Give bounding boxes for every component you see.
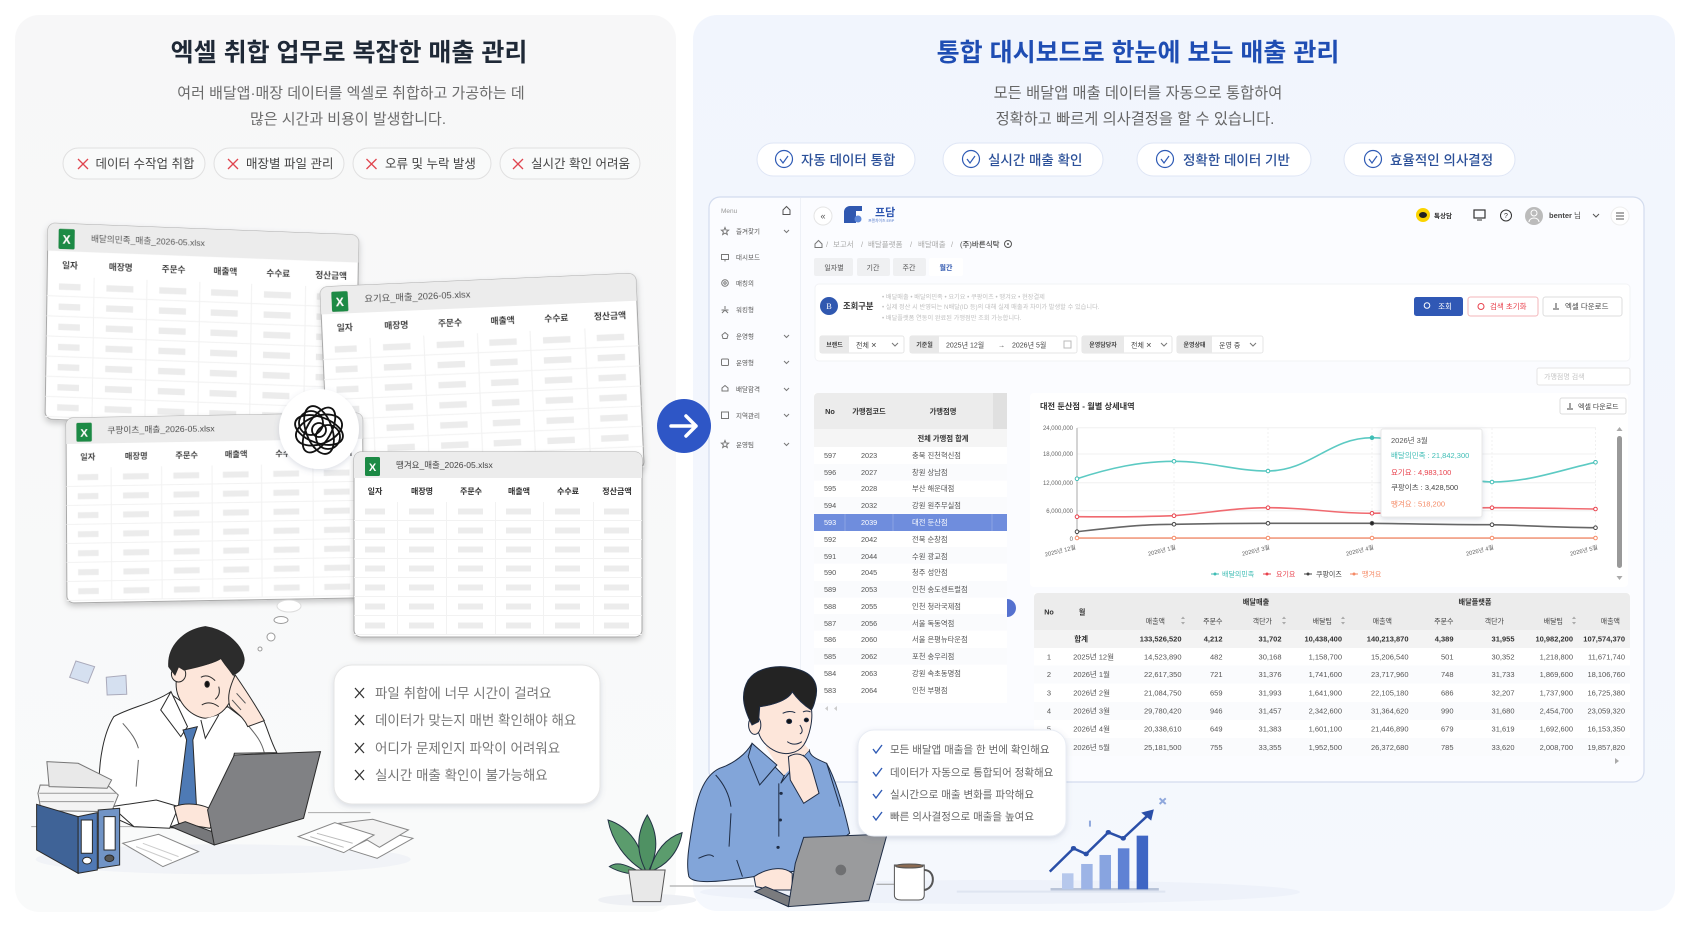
store list table: 2023: [861, 451, 877, 460]
monthly detail table: 30,168: [1259, 652, 1282, 662]
monthly detail table: 18,106,760: [1587, 670, 1625, 679]
store search input: [1537, 368, 1630, 385]
chips: problems: 데이터 수작업 취합: [96, 157, 195, 171]
store list table: 594: [824, 501, 836, 510]
monthly detail table: 22,105,180: [1371, 688, 1408, 698]
callout: problems list: 어디가 문제인지 파악이 어려워요: [375, 741, 560, 756]
monthly detail table: 2026년 1월: [1073, 669, 1110, 679]
chart legend: 쿠팡이츠: [1316, 570, 1342, 578]
sidebar menu: 대시보드: [736, 254, 760, 262]
monthly detail table: 객단가: [1253, 616, 1273, 626]
monthly detail table: 16,725,380: [1587, 688, 1625, 698]
monthly detail table: 배달팁: [1544, 616, 1563, 626]
store search input: 가맹점명 검색: [1544, 372, 1585, 381]
monthly detail table: 월: [1079, 608, 1086, 616]
monthly detail table: 4,212: [1204, 634, 1222, 644]
query panel: 검색 초기화: [1490, 301, 1527, 311]
chart tooltip: 땡겨요 : 518,200: [1391, 498, 1445, 508]
store list table: 수원 광교점: [912, 552, 948, 561]
excel sheet: coupang eats: 수수료: [275, 449, 299, 458]
store list table: [814, 393, 1016, 711]
store list table: 포천 송우리점: [912, 652, 954, 661]
tabs: 주간: [903, 263, 916, 272]
store list table: 2056: [861, 619, 877, 628]
logo and top bar: ?: [1504, 213, 1508, 220]
tabs: 일자별: [824, 263, 844, 272]
store list table: 2039: [861, 518, 877, 527]
store list table: 597: [824, 451, 836, 460]
store list table: 서울 은평뉴타운점: [912, 635, 968, 644]
monthly detail table: 6: [1047, 743, 1051, 752]
callout: problems list: 파일 취합에 너무 시간이 걸려요: [375, 686, 551, 701]
monthly detail table: 140,213,870: [1367, 634, 1408, 644]
query panel: • 배달매출 • 배달의민족 • 요기요 • 쿠팡이츠 • 땡겨요 • 현장결제: [882, 293, 1045, 301]
monthly detail table: 3: [1047, 688, 1051, 698]
monthly detail table: 합계: [1074, 634, 1088, 644]
chips: benefits: 자동 데이터 통합: [801, 153, 895, 168]
sidebar menu: 운영형: [736, 332, 754, 340]
store list table: 가맹점명: [930, 407, 956, 416]
store list table: 595: [824, 484, 836, 493]
excel sheet: yogiyo: X: [336, 295, 344, 309]
chips: benefits: 정확한 데이터 기반: [1183, 153, 1290, 168]
monthly detail table: 26,372,680: [1371, 743, 1408, 752]
query panel: 2026년 5월: [1012, 340, 1046, 350]
monthly detail table: 32,207: [1492, 688, 1514, 698]
excel sheet: ddangyo: 땡겨요_매출_2026-05.xlsx: [396, 460, 493, 470]
breadcrumb: [815, 239, 1012, 249]
excel sheet: yogiyo: 요기요_매출_2026-05.xlsx: [364, 290, 471, 304]
query panel: • 배달플랫폼 연동이 완료된 가맹점만 조회 가능합니다.: [882, 314, 1022, 322]
monthly detail table: 679: [1441, 724, 1454, 734]
monthly detail table: 946: [1210, 706, 1222, 716]
breadcrumb: 배달매출: [918, 239, 946, 249]
line chart card: 2026년 1월: [1147, 543, 1176, 558]
query panel: B: [826, 302, 832, 311]
monthly detail table: 2,008,700: [1540, 743, 1573, 752]
monthly detail table: 31,702: [1259, 634, 1282, 644]
monthly detail table: 배달팁: [1313, 616, 1332, 626]
excel sheet: ddangyo: 정산금액: [602, 486, 632, 496]
sidebar menu: Menu: [721, 208, 738, 215]
monthly detail table: 배달플랫폼: [1458, 598, 1492, 606]
excel sheet: coupang eats: X: [80, 428, 88, 440]
monthly detail table: 2026년 3월: [1073, 706, 1110, 716]
monthly detail table: 31,993: [1259, 688, 1282, 698]
tabs: 기간: [867, 263, 880, 272]
line chart card: 엑셀 다운로드: [1578, 402, 1619, 411]
line chart card: 대전 둔산점 - 월별 상세내역: [1040, 401, 1135, 411]
tabs: 월간: [940, 263, 953, 272]
monthly detail table: 2: [1047, 670, 1051, 679]
excel sheet: yogiyo: 주문수: [438, 317, 462, 328]
monthly detail table: 23,717,960: [1371, 670, 1408, 679]
excel sheet: ddangyo: [354, 452, 642, 637]
logo and top bar: 톡상담: [1434, 211, 1452, 220]
monthly detail table: 107,574,370: [1583, 634, 1625, 644]
breadcrumb: 배달플랫폼: [868, 239, 903, 249]
monthly detail table: 23,059,320: [1587, 706, 1625, 716]
description: excel problem: 많은 시간과 비용이 발생합니다.: [250, 111, 446, 128]
chart legend: 땡겨요: [1362, 570, 1382, 578]
store list table: 강원 원주무실점: [912, 501, 961, 510]
store list table: 589: [824, 585, 836, 594]
monthly detail table: 501: [1441, 652, 1454, 662]
monthly detail table: 31,733: [1492, 670, 1514, 679]
callout: problems list: 실시간 매출 확인이 불가능해요: [375, 768, 548, 783]
monthly detail table: 2026년 5월: [1073, 742, 1110, 752]
logo and top bar: [814, 206, 1629, 225]
store list table: 2044: [861, 552, 877, 561]
monthly detail table: 482: [1210, 652, 1222, 662]
query panel: 운영 중: [1219, 340, 1241, 350]
monthly detail table: 1: [1047, 652, 1051, 662]
chips: problems: [63, 148, 640, 179]
monthly detail table: 748: [1441, 670, 1454, 679]
query panel: 운영상태: [1183, 341, 1206, 349]
monthly detail table: 31,619: [1492, 724, 1514, 734]
line chart card: 6,000,000: [1046, 509, 1074, 515]
excel sheet: baemin: [45, 223, 359, 431]
excel sheet: baemin: 주문수: [162, 264, 186, 275]
sidebar menu: 운영형: [736, 358, 754, 367]
callout: benefits list: 데이터가 자동으로 통합되어 정확해요: [890, 766, 1054, 779]
store list table: 인천 송도센트럴점: [912, 585, 968, 594]
store list table: 대전 둔산점: [912, 518, 948, 527]
chart tooltip: 요기요 : 4,983,100: [1391, 468, 1451, 477]
monthly detail table: 133,526,520: [1140, 634, 1182, 644]
chips: benefits: [757, 143, 1515, 176]
line chart card: 2026년 4월: [1465, 543, 1494, 558]
excel sheet: baemin: 정산금액: [315, 269, 347, 281]
excel sheet: coupang eats: 일자: [80, 452, 96, 462]
store list table: No: [825, 407, 835, 416]
breadcrumb: /: [826, 240, 829, 249]
line chart card: 2026년 5월: [1569, 543, 1598, 558]
query panel: 조회: [1438, 302, 1452, 311]
monthly detail table: 4: [1047, 706, 1051, 716]
monthly detail table: 25,181,500: [1144, 743, 1182, 752]
monthly detail table: 21,084,750: [1144, 688, 1182, 698]
monthly detail table: 4,389: [1435, 634, 1454, 644]
monthly detail table: 785: [1441, 743, 1454, 752]
monthly detail table: 1,218,800: [1540, 652, 1573, 662]
tabs: [814, 258, 963, 276]
monthly detail table: 30,352: [1492, 652, 1514, 662]
excel sheet: ddangyo: X: [369, 462, 377, 474]
query panel: 운영담당자: [1089, 341, 1117, 349]
illustration: worried man at laptop: [31, 627, 413, 874]
chart scrollbar: [1616, 427, 1622, 580]
chips: benefits: 효율적인 의사결정: [1390, 153, 1493, 168]
sidebar menu: 즐겨찾기: [736, 226, 760, 236]
monthly detail table: 29,780,420: [1144, 706, 1182, 716]
description: excel problem: 여러 배달앱·매장 데이터를 엑셀로 취합하고 가공하는 데: [177, 85, 525, 102]
breadcrumb: /: [951, 240, 954, 249]
chart tooltip: [1381, 429, 1482, 517]
monthly detail table: 33,355: [1259, 743, 1282, 752]
dashboard window: [709, 197, 1644, 782]
monthly detail table: 649: [1210, 724, 1222, 734]
callout: problems list: 데이터가 맞는지 매번 확인해야 해요: [375, 713, 576, 728]
monthly detail table: 주문수: [1203, 618, 1223, 626]
breadcrumb: 보고서: [833, 240, 854, 249]
store list table: 충북 진천혁신점: [912, 451, 961, 460]
monthly detail table: 1,692,600: [1540, 724, 1573, 734]
monthly detail table: 11,671,740: [1588, 652, 1625, 662]
store list table: 2042: [861, 535, 877, 544]
monthly detail table: 31,383: [1259, 724, 1282, 734]
monthly detail table: 14,523,890: [1144, 652, 1182, 662]
chart legend: 요기요: [1276, 570, 1296, 578]
store list table: 585: [824, 652, 836, 661]
breadcrumb: /: [861, 240, 864, 249]
store list table: 584: [824, 669, 836, 678]
heading: excel problem: 엑셀 취합 업무로 복잡한 매출 관리: [171, 39, 527, 67]
callout: benefits list: [858, 730, 1066, 836]
monthly detail table: 33,620: [1492, 743, 1514, 752]
excel sheet: baemin: 배달의민족_매출_2026-05.xlsx: [91, 233, 206, 248]
monthly detail table: 2025년 12월: [1073, 652, 1114, 662]
panel: excel problem: [15, 15, 676, 912]
store list table: 586: [824, 635, 836, 644]
excel sheet: ddangyo: 주문수: [460, 487, 483, 496]
excel sheet: ddangyo: 매출액: [508, 486, 530, 496]
excel sheet: ddangyo: 매장명: [411, 486, 433, 496]
store list table: 2053: [861, 585, 877, 594]
monthly detail table: 주문수: [1434, 618, 1454, 626]
monthly detail table: 5: [1047, 724, 1051, 734]
monthly detail table: 721: [1210, 670, 1222, 679]
query panel: 기준월: [916, 341, 933, 349]
excel sheet: coupang eats: 매장명: [125, 451, 148, 461]
monthly detail table: 10,982,200: [1535, 634, 1573, 644]
monthly detail table: 10,438,400: [1304, 634, 1342, 644]
excel sheet: coupang eats: 주문수: [175, 451, 199, 460]
excel sheet: ddangyo: 수수료: [557, 487, 580, 496]
store list table: 2060: [861, 635, 877, 644]
chart tooltip: 쿠팡이츠 : 3,428,500: [1391, 482, 1458, 492]
query panel: 2025년 12월: [946, 340, 984, 350]
excel sheet: baemin: X: [63, 234, 71, 247]
monthly detail table: 1,952,500: [1309, 743, 1342, 752]
chips: problems: 매장별 파일 관리: [246, 157, 333, 171]
monthly detail table: 755: [1210, 743, 1222, 752]
monthly detail table: 2,342,600: [1309, 706, 1342, 716]
excel sheet: yogiyo: 일자: [337, 321, 353, 333]
arrow: before to after: [657, 399, 711, 453]
description: excel problem: [177, 85, 525, 128]
sidebar menu: 운영팀: [736, 440, 754, 449]
monthly detail table: 686: [1441, 688, 1454, 698]
chips: problems: 오류 및 누락 발생: [385, 157, 476, 171]
monthly detail table: 19,857,820: [1587, 743, 1625, 752]
chart tooltip: 배달의민족 : 21,842,300: [1391, 450, 1469, 460]
query panel: 엑셀 다운로드: [1565, 301, 1609, 311]
monthly detail table: 31,955: [1492, 634, 1514, 644]
chips: benefits: 실시간 매출 확인: [988, 153, 1082, 168]
monthly detail table: 990: [1441, 706, 1454, 716]
store list table: 591: [824, 552, 836, 561]
sidebar menu: 지역관리: [736, 411, 760, 420]
store list table: 2062: [861, 652, 877, 661]
sidebar menu: [721, 206, 790, 449]
monthly detail table: No: [1044, 608, 1054, 616]
monthly detail table: 31,680: [1492, 706, 1514, 716]
monthly detail table: 1,741,600: [1309, 670, 1342, 679]
logo and top bar: benter 님: [1549, 211, 1581, 220]
store list table: 2032: [861, 501, 877, 510]
illustration: plant: [598, 815, 696, 906]
store list table: 인천 청라국제점: [912, 602, 961, 611]
chart tooltip: 2026년 3월: [1391, 435, 1428, 445]
excel sheet: baemin: 매출액: [213, 265, 238, 277]
monthly detail table: 매출액: [1373, 616, 1392, 626]
chips: problems: 실시간 확인 어려움: [531, 157, 630, 171]
store list table: 2063: [861, 669, 877, 678]
line chart card: 0: [1070, 537, 1074, 543]
excel sheet: ddangyo: 일자: [368, 486, 383, 496]
store list table: 전북 순창점: [912, 535, 948, 544]
store list table: 2028: [861, 484, 877, 493]
monthly detail table: 매출액: [1601, 616, 1620, 626]
store list table: 2027: [861, 468, 877, 477]
excel sheet: yogiyo: [320, 273, 644, 483]
monthly detail table: 31,457: [1259, 706, 1282, 716]
excel sheet: coupang eats: [66, 413, 364, 603]
excel sheet: baemin: 수수료: [266, 268, 290, 279]
store list table: 596: [824, 468, 836, 477]
callout: benefits list: 모든 배달앱 매출을 한 번에 확인해요: [890, 743, 1050, 756]
store list table: 2064: [861, 686, 877, 695]
monthly detail table: [1034, 593, 1630, 764]
monthly detail table: 31,376: [1259, 670, 1282, 679]
line chart card: [1030, 393, 1628, 587]
query panel: 조회구분: [843, 301, 874, 311]
line chart card: 2025년 12월: [1044, 543, 1076, 559]
monthly detail table: 1,869,600: [1540, 670, 1573, 679]
sidebar menu: 배달합격: [736, 384, 760, 394]
excel sheet: coupang eats: 쿠팡이츠_매출_2026-05.xlsx: [107, 424, 215, 435]
description: dashboard solution: 정확하고 빠르게 의사결정을 할 수 있습니다.: [996, 111, 1274, 128]
line chart card: 2026년 4월: [1345, 543, 1374, 558]
illustration: confident man at laptop: [670, 667, 933, 907]
sidebar menu: 워킹형: [736, 306, 754, 314]
monthly detail table: 1,737,900: [1540, 688, 1573, 698]
excel sheet: yogiyo: 매출액: [490, 314, 515, 326]
excel sheet: baemin: 매장명: [109, 261, 133, 273]
excel sheet: yogiyo: 수수료: [544, 313, 569, 324]
chart legend: [1211, 570, 1382, 578]
monthly detail table: 1,601,100: [1309, 724, 1342, 734]
monthly detail table: 1,158,700: [1309, 652, 1342, 662]
icon: tangled scribble: [279, 389, 359, 469]
store list table: 창원 상남점: [912, 468, 948, 477]
thought bubbles: [258, 600, 301, 651]
query panel: 전체 ✕: [856, 340, 877, 350]
store list table: 강원 속초동명점: [912, 669, 961, 678]
excel sheet: coupang eats: 정산금액: [322, 447, 352, 458]
description: dashboard solution: 모든 배달앱 매출 데이터를 자동으로 통합하여: [994, 85, 1282, 102]
breadcrumb: /: [910, 240, 913, 249]
store list table: 592: [824, 535, 836, 544]
excel sheet: baemin: 일자: [62, 259, 78, 271]
query panel: • 실제 정산 시 반영되는 N배달(ID 등)의 대해 실제 매출과 차이가 발생할 수 있습니다.: [882, 303, 1100, 311]
store list table: 590: [824, 568, 836, 577]
monthly detail table: 20,338,610: [1144, 724, 1182, 734]
line chart card: 18,000,000: [1043, 452, 1074, 458]
icon: growth chart: [957, 798, 1166, 892]
sidebar menu: 매칭의: [736, 278, 754, 288]
query panel: →: [998, 342, 1005, 350]
callout: benefits list: 실시간으로 매출 변화를 파악해요: [890, 788, 1034, 801]
callout: benefits list: 빠른 의사결정으로 매출을 높여요: [890, 811, 1034, 823]
monthly detail table: 659: [1210, 688, 1222, 698]
logo and top bar: 프담: [875, 206, 895, 219]
monthly detail table: 2026년 4월: [1073, 724, 1110, 734]
bottom desk shadow: [700, 880, 1300, 904]
line chart card: 2026년 3월: [1241, 543, 1270, 558]
monthly detail table: 객단가: [1485, 616, 1505, 626]
line chart card: 12,000,000: [1043, 481, 1074, 487]
excel sheet: coupang eats: 매출액: [225, 449, 248, 459]
query panel: 브랜드: [826, 341, 843, 349]
store list table: 부산 해운대점: [912, 484, 954, 493]
monthly detail table: 배달매출: [1243, 598, 1270, 606]
monthly detail table: 15,206,540: [1371, 652, 1408, 662]
store list table: 593: [824, 518, 836, 527]
query panel: [815, 284, 1630, 361]
store list table: 전체 가맹점 합계: [917, 434, 969, 443]
store list table: 2055: [861, 602, 877, 611]
line chart card: 24,000,000: [1043, 426, 1074, 432]
query panel: 전체 ✕: [1131, 340, 1152, 350]
store list table: 청주 성안점: [912, 568, 948, 577]
monthly detail table: 2,454,700: [1540, 706, 1573, 716]
logo and top bar: «: [820, 211, 826, 221]
monthly detail table: 1,641,900: [1309, 688, 1342, 698]
store list table: 583: [824, 686, 836, 695]
store list table: 서울 독동역점: [912, 619, 954, 628]
store list table: 588: [824, 602, 836, 611]
monthly detail table: 21,446,890: [1371, 724, 1408, 734]
excel sheet: yogiyo: 매장명: [384, 319, 409, 331]
store list table: 587: [824, 619, 836, 628]
monthly detail table: 31,364,620: [1371, 706, 1408, 716]
panel: dashboard solution: [598, 15, 1675, 911]
monthly detail table: 매출액: [1146, 616, 1165, 626]
store list table: 가맹점코드: [852, 407, 886, 416]
monthly detail table: 16,153,350: [1587, 724, 1625, 734]
heading: dashboard solution: 통합 대시보드로 한눈에 보는 매출 관리: [937, 39, 1339, 67]
monthly detail table: 22,617,350: [1144, 670, 1182, 679]
callout: problems list: [334, 665, 600, 804]
excel sheet: yogiyo: 정산금액: [594, 309, 626, 322]
chart legend: 배달의민족: [1222, 570, 1255, 578]
breadcrumb: (주)바른식탁: [960, 239, 1000, 249]
store list table: 2045: [861, 568, 877, 577]
store list table: 인천 부평점: [912, 686, 948, 695]
logo and top bar: 프랜차이즈 ERP: [868, 218, 895, 223]
description: dashboard solution: [994, 85, 1282, 128]
monthly detail table: 2026년 2월: [1073, 688, 1110, 698]
